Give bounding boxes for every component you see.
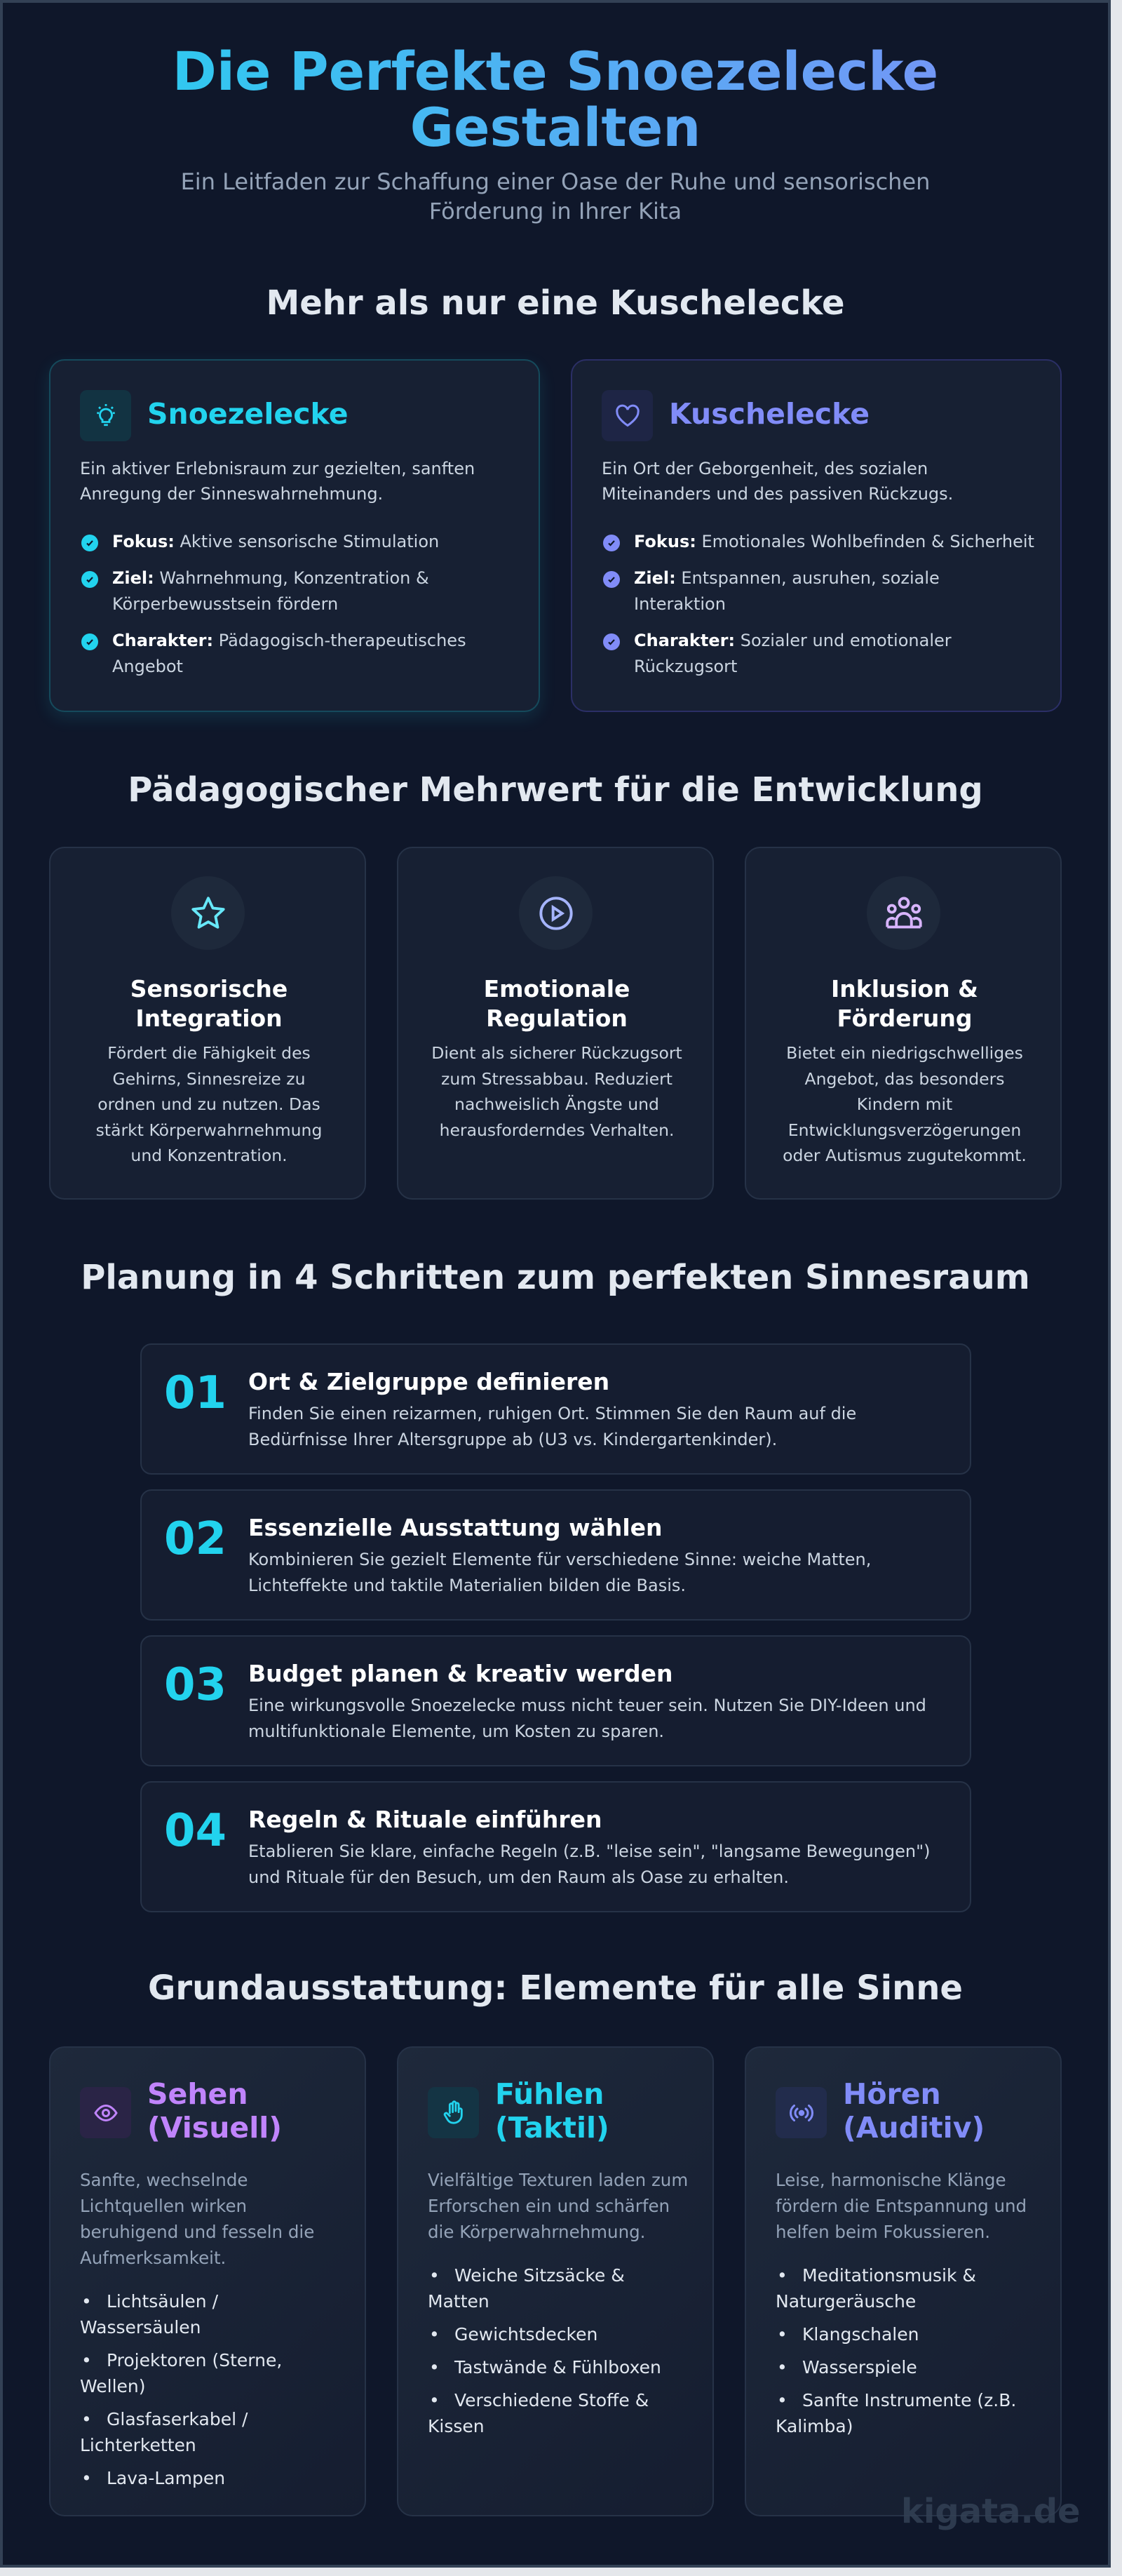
text: Fördert die Fähigkeit des	[107, 1043, 311, 1063]
icon: group	[867, 876, 940, 950]
watermark: kigata.de	[901, 2492, 1081, 2531]
heading: Integration	[135, 1005, 283, 1032]
text: ordnen und zu nutzen. Das	[97, 1094, 320, 1114]
bullet list: Rückzugsort	[634, 657, 737, 676]
text: Anregung der Sinneswahrnehmung.	[80, 484, 383, 504]
list: Projektoren (Sterne,	[107, 2350, 282, 2370]
heading: Inklusion &	[831, 975, 978, 1002]
text	[80, 459, 475, 504]
step 03: Budget planen & kreativ werden	[248, 1660, 672, 1687]
list	[80, 2291, 282, 2488]
list: Wellen)	[80, 2376, 146, 2396]
title	[0, 43, 1111, 156]
bullet list: Ziel: Entspannen, ausruhen, soziale	[634, 568, 940, 588]
text	[602, 459, 953, 504]
text: Ein aktiver Erlebnisraum zur gezielten, sanften	[80, 459, 475, 478]
text	[96, 1043, 322, 1165]
text: herausforderndes Verhalten.	[440, 1120, 674, 1139]
text: beruhigend und fesseln die	[80, 2222, 314, 2242]
icon: play circle	[519, 876, 593, 950]
text: Angebot, das besonders	[805, 1069, 1004, 1089]
list: Verschiedene Stoffe &	[454, 2390, 649, 2410]
icon: hand	[428, 2087, 479, 2138]
text: helfen beim Fokussieren.	[776, 2222, 990, 2242]
text	[80, 2170, 314, 2268]
list	[776, 2265, 1016, 2436]
text: Sanfte, wechselnde	[80, 2170, 248, 2190]
bullet list: Angebot	[112, 657, 183, 676]
step 03: 03	[164, 1659, 227, 1711]
step 03: Eine wirkungsvolle Snoezelecke muss nicht teuer sein. Nutzen Sie DIY-Ideen und	[248, 1696, 926, 1715]
heading: Sehen	[147, 2077, 248, 2111]
text: zum Stressabbau. Reduziert	[441, 1069, 672, 1089]
heading: Snoezelecke	[147, 397, 348, 431]
list: Kissen	[428, 2416, 485, 2436]
list: Meditationsmusik &	[802, 2265, 976, 2286]
title: Die Perfekte Snoezelecke	[173, 40, 938, 102]
list: Naturgeräusche	[776, 2291, 916, 2312]
text: Kindern mit	[857, 1094, 952, 1114]
bullet list: Ziel: Wahrnehmung, Konzentration &	[112, 568, 429, 588]
heading: Pädagogischer Mehrwert: Pädagogischer Mehrwert für die Entwicklung	[128, 770, 983, 810]
subtitle	[181, 168, 930, 224]
step 04: Etablieren Sie klare, einfache Regeln (z.B. "leise sein", "langsame Bewegungen")	[248, 1842, 931, 1861]
list: Lichtsäulen /	[107, 2291, 218, 2312]
step 02	[140, 1489, 971, 1621]
panel: Hören	[745, 2046, 1062, 2516]
step 02: Lichteffekte und taktile Materialien bilden die Basis.	[248, 1576, 686, 1595]
text	[428, 2170, 688, 2242]
panel: Inklusion & Förderung	[745, 847, 1062, 1200]
step 01: Ort & Zielgruppe definieren	[248, 1368, 609, 1395]
text: die Körperwahrnehmung.	[428, 2222, 645, 2242]
bullet list	[81, 532, 466, 676]
heading: (Visuell)	[147, 2111, 282, 2145]
icon: heart	[602, 390, 653, 441]
text: Dient als sicherer Rückzugsort	[431, 1043, 682, 1063]
heading: Regulation	[486, 1005, 628, 1032]
icon: star	[171, 876, 245, 950]
text	[776, 2170, 1027, 2242]
heading	[130, 975, 288, 1032]
step 01: 01	[164, 1367, 227, 1419]
list: Glasfaserkabel /	[107, 2409, 248, 2429]
panel: Emotionale Regulation	[397, 847, 714, 1200]
step 01	[140, 1343, 971, 1475]
heading: (Auditiv)	[843, 2111, 985, 2145]
list: Gewichtsdecken	[454, 2324, 597, 2344]
step 02: Kombinieren Sie gezielt Elemente für verschiedene Sinne: weiche Matten,	[248, 1550, 871, 1569]
step 04: 04	[164, 1805, 227, 1857]
list: Wasserspiele	[802, 2357, 917, 2377]
list: Lichterketten	[80, 2435, 196, 2455]
bullet list: Fokus: Aktive sensorische Stimulation	[112, 532, 439, 551]
step 02: Essenzielle Ausstattung wählen	[248, 1514, 663, 1541]
text: nachweislich Ängste und	[454, 1094, 659, 1114]
heading: (Taktil)	[495, 2111, 609, 2145]
panel: Snoezelecke	[49, 359, 540, 712]
text: Miteinanders und des passiven Rückzugs.	[602, 484, 953, 504]
heading	[495, 2077, 609, 2145]
text: Bietet ein niedrigschwelliges	[786, 1043, 1023, 1063]
heading	[147, 2077, 282, 2145]
list: Weiche Sitzsäcke &	[454, 2265, 625, 2286]
text: fördern die Entspannung und	[776, 2196, 1027, 2216]
text: Leise, harmonische Klänge	[776, 2170, 1006, 2190]
step 04: Regeln & Rituale einführen	[248, 1806, 602, 1833]
list: Lava-Lampen	[107, 2468, 225, 2488]
text: Erforschen ein und schärfen	[428, 2196, 670, 2216]
panel: Sensorische Integration	[49, 847, 366, 1200]
heading: Mehr als nur eine Kuschelecke: Mehr als nur eine Kuschelecke	[266, 283, 845, 323]
title: Gestalten	[410, 96, 701, 159]
text: und Konzentration.	[130, 1146, 288, 1165]
text: Aufmerksamkeit.	[80, 2248, 226, 2268]
text: Gehirns, Sinnesreize zu	[112, 1069, 305, 1089]
list: Klangschalen	[802, 2324, 919, 2344]
subtitle: Ein Leitfaden zur Schaffung einer Oase der Ruhe und sensorischen	[181, 168, 930, 195]
heading: Grundausstattung: Grundausstattung: Elemente für alle Sinne	[148, 1968, 963, 2008]
icon: lightbulb	[80, 390, 131, 441]
panel: Fühlen	[397, 2046, 714, 2516]
text: Vielfältige Texturen laden zum	[428, 2170, 688, 2190]
list: Matten	[428, 2291, 489, 2312]
step 01: Finden Sie einen reizarmen, ruhigen Ort. Stimmen Sie den Raum auf die	[248, 1404, 856, 1423]
heading: Planung in 4 Schritten: Planung in 4 Schritten zum perfekten Sinnesraum	[81, 1258, 1030, 1297]
step 04	[140, 1781, 971, 1912]
heading: Emotionale	[484, 975, 630, 1002]
text: oder Autismus zugutekommt.	[783, 1146, 1027, 1165]
heading: Förderung	[837, 1005, 973, 1032]
text: Entwicklungsverzögerungen	[788, 1120, 1021, 1139]
heading	[484, 975, 630, 1032]
list: Tastwände & Fühlboxen	[454, 2357, 661, 2377]
subtitle: Förderung in Ihrer Kita	[429, 198, 682, 224]
panel: Sehen	[49, 2046, 366, 2516]
text: stärkt Körperwahrnehmung	[96, 1120, 322, 1139]
panel: Kuschelecke	[571, 359, 1062, 712]
text: Lichtquellen wirken	[80, 2196, 247, 2216]
bullet list: Charakter: Pädagogisch-therapeutisches	[112, 631, 466, 650]
list: Sanfte Instrumente (z.B.	[802, 2390, 1016, 2410]
step 01: Bedürfnisse Ihrer Altersgruppe ab (U3 vs. Kindergartenkinder).	[248, 1430, 777, 1449]
list	[428, 2265, 661, 2436]
list: Kalimba)	[776, 2416, 853, 2436]
list: Wassersäulen	[80, 2317, 201, 2337]
heading: Hören	[843, 2077, 941, 2111]
text	[783, 1043, 1027, 1165]
bullet list: Körperbewusstsein fördern	[112, 594, 338, 614]
step 03	[140, 1635, 971, 1766]
heading: Kuschelecke	[669, 397, 870, 431]
step 02: 02	[164, 1513, 227, 1565]
bullet list: Interaktion	[634, 594, 726, 614]
icon: eye	[80, 2087, 131, 2138]
bullet list: Fokus: Emotionales Wohlbefinden & Sicherheit	[634, 532, 1034, 551]
text	[431, 1043, 682, 1139]
step 04: und Rituale für den Besuch, um den Raum als Oase zu erhalten.	[248, 1867, 789, 1887]
text: Ein Ort der Geborgenheit, des sozialen	[602, 459, 928, 478]
bullet list: Charakter: Sozialer und emotionaler	[634, 631, 952, 650]
heading	[831, 975, 978, 1032]
bullet list	[603, 532, 1034, 676]
heading: Sensorische	[130, 975, 288, 1002]
icon: sound waves	[776, 2087, 827, 2138]
heading	[843, 2077, 985, 2145]
heading: Fühlen	[495, 2077, 604, 2111]
step 03: multifunktionale Elemente, um Kosten zu sparen.	[248, 1722, 664, 1741]
